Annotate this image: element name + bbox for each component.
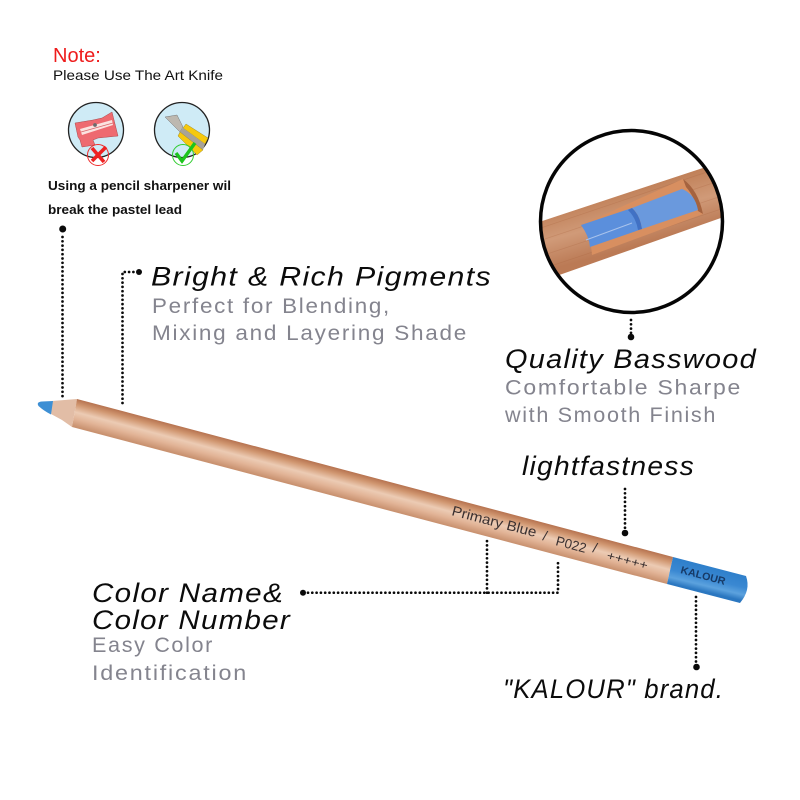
heading: color name and number: Color Name& (92, 578, 284, 608)
heading: color name and number (92, 578, 291, 635)
heading: quality basswood: Quality Basswood (505, 344, 757, 374)
heading: color name and number: Color Number (92, 605, 291, 635)
pencil colour imprint: +++++ (605, 548, 649, 573)
pencil brand imprint: KALOUR (679, 564, 727, 588)
text: colour name description: Easy Color (92, 634, 214, 657)
heading: brand: "KALOUR" brand. (503, 674, 724, 704)
text: pigments description (152, 295, 468, 345)
pencil tip wood (51, 399, 77, 427)
pencil cap (667, 557, 748, 603)
leader: colour name (300, 540, 558, 596)
pencil (38, 399, 748, 603)
text: pigments description: Mixing and Layering Shade (152, 322, 468, 345)
pencil colour imprint: P022 (554, 533, 588, 556)
icon: art knife approved (154, 102, 210, 166)
leader: tip (59, 226, 66, 397)
pencil tip lead (38, 401, 53, 414)
leader: pigments (122, 269, 142, 403)
leader: basswood (628, 320, 634, 340)
warning text: break the pastel lead (48, 202, 182, 217)
note subheading: Please Use The Art Knife (53, 67, 223, 83)
pencil colour imprint: / (591, 539, 599, 556)
pencil colour imprint (450, 502, 649, 573)
pencil body (72, 399, 673, 584)
pencil colour imprint: Primary Blue (450, 502, 539, 540)
text: basswood description: Comfortable Sharpe (505, 376, 742, 400)
leader: brand (693, 597, 700, 670)
text: pigments description: Perfect for Blending, (152, 295, 391, 318)
heading: bright and rich pigments: Bright & Rich Pigments (151, 262, 492, 292)
text: colour name description (92, 634, 248, 685)
warning text: Using a pencil sharpener wil (48, 178, 231, 193)
text: colour name description: Identification (92, 662, 248, 685)
icon: pencil sharpener prohibited (68, 102, 124, 166)
warning text (48, 178, 231, 217)
pencil detail circle (530, 130, 735, 312)
leader: lightfastness (622, 489, 628, 536)
heading: lightfastness: lightfastness (522, 451, 695, 481)
text: basswood description (504, 376, 742, 427)
text: basswood description: with Smooth Finish (504, 404, 717, 427)
pencil colour imprint: / (541, 527, 549, 544)
note heading: Note: (53, 45, 101, 67)
